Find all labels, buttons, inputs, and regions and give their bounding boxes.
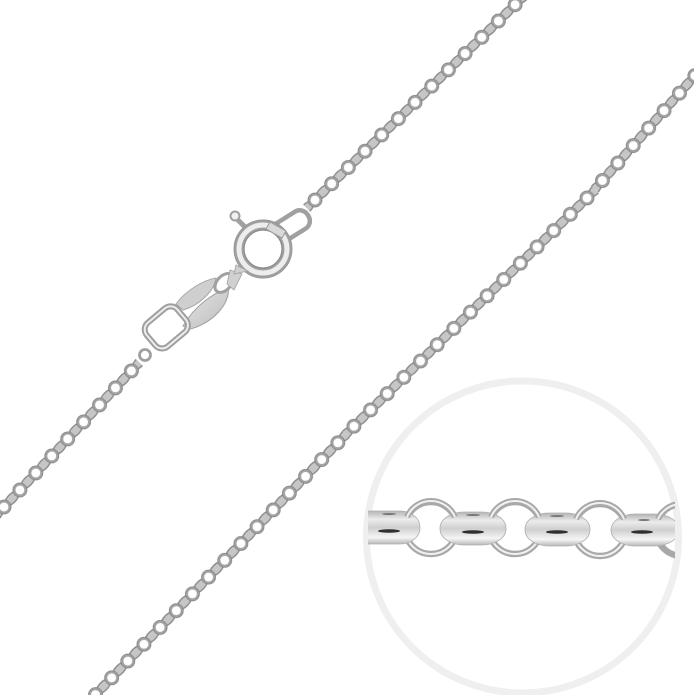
connector link [211,270,237,296]
clasp assembly [140,207,313,360]
magnified round rings [405,502,694,556]
magnified chain links [345,501,694,556]
chain: long strand upper section [339,43,694,442]
spring ring collar [266,222,286,238]
tag back plate [176,278,216,310]
chain: clasp strand to left edge [0,356,147,539]
upper attachment link [269,207,313,245]
magnified inset circle [345,381,694,693]
chain: clasp strand to top edge [300,0,547,215]
small end ring [140,350,150,360]
chain: long strand lower section [64,427,353,695]
spring ring [239,225,287,273]
tag front plate [183,288,228,329]
large end link [141,303,192,352]
spring ring tab [236,218,246,228]
magnified side links [345,511,679,546]
ring tops passing over links [407,501,680,519]
link highlights [378,513,653,534]
